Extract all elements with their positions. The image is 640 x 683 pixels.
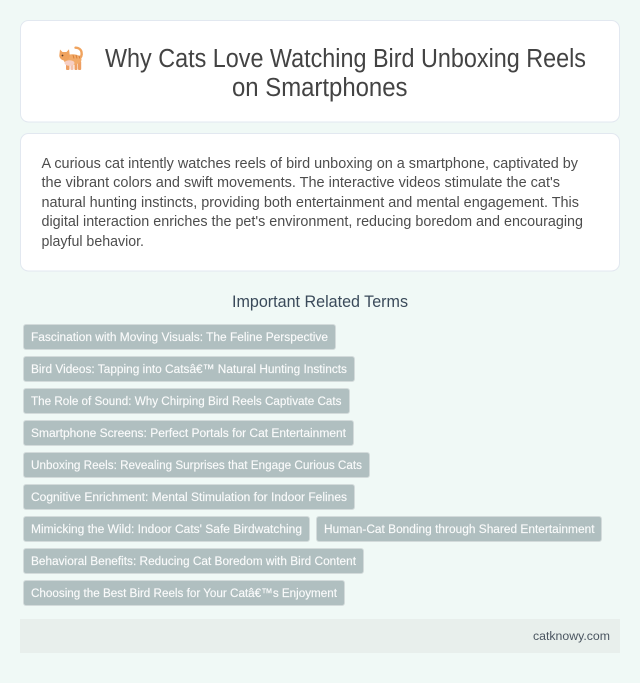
footer bbox=[20, 619, 620, 653]
tag 1: Fascination with Moving Visuals: The Feline Perspective bbox=[31, 330, 328, 344]
description text: digital interaction enriches the pet's environment, reducing boredom and encouraging bbox=[42, 214, 583, 230]
heading: important related terms: Important Related Terms bbox=[232, 293, 408, 311]
tag 1 bbox=[24, 324, 336, 350]
description text: the vibrant colors and swift movements. The interactive videos stimulate the cat's bbox=[42, 175, 560, 191]
panel: description bbox=[20, 134, 620, 271]
tag 4 bbox=[24, 420, 354, 446]
icon: cat bbox=[59, 48, 82, 70]
tag 8: Human-Cat Bonding through Shared Entertainment bbox=[324, 522, 595, 536]
tag 7: Mimicking the Wild: Indoor Cats' Safe Birdwatching bbox=[31, 522, 302, 536]
tag list bbox=[24, 324, 602, 606]
description text: A curious cat intently watches reels of bird unboxing on a smartphone, captivated by bbox=[42, 156, 579, 172]
tag 9: Behavioral Benefits: Reducing Cat Boredom with Bird Content bbox=[31, 554, 357, 568]
tag 6: Cognitive Enrichment: Mental Stimulation for Indoor Felines bbox=[31, 490, 347, 504]
tag 8 bbox=[316, 516, 602, 542]
tag 3: The Role of Sound: Why Chirping Bird Reels Captivate Cats bbox=[31, 394, 342, 408]
tag 4: Smartphone Screens: Perfect Portals for Cat Entertainment bbox=[31, 426, 347, 440]
title line 1: Why Cats Love Watching Bird Unboxing Reels bbox=[105, 45, 586, 73]
tag 7 bbox=[24, 516, 310, 542]
description text: natural hunting instincts, providing both entertainment and mental engagement. This bbox=[42, 195, 579, 211]
tag 2 bbox=[24, 356, 354, 382]
tag 6 bbox=[24, 484, 354, 510]
title line 2: on Smartphones bbox=[232, 74, 408, 102]
tag 3 bbox=[24, 388, 350, 414]
footer source: catknowy.com bbox=[533, 629, 610, 643]
tag 2: Bird Videos: Tapping into Catsâ€™ Natural Hunting Instincts bbox=[31, 362, 347, 376]
panel: title card bbox=[20, 20, 620, 122]
description text bbox=[42, 156, 583, 250]
tag 5: Unboxing Reels: Revealing Surprises that Engage Curious Cats bbox=[31, 458, 362, 472]
tag 10 bbox=[24, 580, 344, 606]
tag 5 bbox=[24, 452, 370, 478]
tag 10: Choosing the Best Bird Reels for Your Catâ€™s Enjoyment bbox=[31, 586, 338, 600]
tag 9 bbox=[24, 548, 364, 574]
description text: playful behavior. bbox=[42, 234, 144, 250]
